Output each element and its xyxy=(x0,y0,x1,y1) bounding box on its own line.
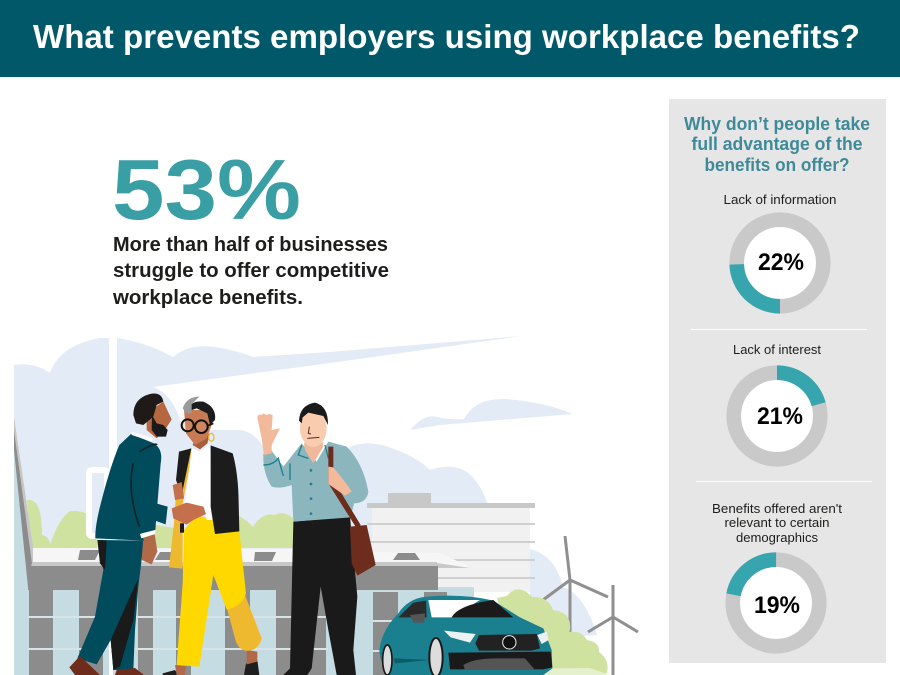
man in suit: shoes xyxy=(69,656,144,675)
car: mirror xyxy=(410,613,425,623)
panel heading: Why don’t people take xyxy=(684,114,870,134)
waving man: shirt xyxy=(263,442,368,522)
car: wheels xyxy=(429,638,443,675)
window frame white post xyxy=(109,338,117,675)
woman: orange lower leg xyxy=(227,595,262,651)
background: bushes behind window xyxy=(27,500,293,548)
statistic description: workplace benefits. xyxy=(112,287,303,309)
waving man: bag strap xyxy=(328,447,361,528)
donut chart: 21%: 21% xyxy=(757,403,803,430)
woman: hand on strap xyxy=(173,482,184,500)
man in suit: far sleeve xyxy=(153,503,168,524)
person: man in blue shirt waving xyxy=(257,403,376,675)
car: headlights xyxy=(444,631,549,644)
teal car xyxy=(379,596,552,675)
woman: clasped hands xyxy=(172,503,206,525)
rooftop walkway and facade xyxy=(14,417,474,675)
man in suit: hand xyxy=(142,534,157,564)
label: benefits not relevant to certain demographics xyxy=(712,501,842,545)
waving man: bag xyxy=(350,525,376,576)
woman: shoes xyxy=(163,660,259,675)
donut chart: 19%: 19% xyxy=(754,592,800,619)
label: benefits not relevant to certain demographics: demographics xyxy=(736,530,819,545)
label: benefits not relevant to certain demographics: Benefits offered aren't xyxy=(712,501,842,516)
panel heading: benefits on offer? xyxy=(704,155,850,175)
man in suit: trousers xyxy=(77,540,144,670)
donut chart: 22% xyxy=(737,220,823,306)
person: man in teal suit xyxy=(69,394,172,675)
headline statistic: 53%: 53% xyxy=(112,143,301,238)
car: windscreen xyxy=(428,600,480,617)
car: body xyxy=(379,596,552,675)
panel heading xyxy=(684,114,870,175)
title banner xyxy=(0,0,900,77)
wind turbines xyxy=(543,536,638,675)
ground xyxy=(350,668,610,675)
label: lack of information: Lack of information xyxy=(724,192,836,207)
woman: blazer xyxy=(176,445,239,534)
title banner: What prevents employers using workplace benefits? xyxy=(33,18,860,55)
waving man: trousers xyxy=(283,517,357,675)
person: woman in yellow trousers xyxy=(163,397,262,675)
illustration: city scene with three colleagues and a car xyxy=(14,336,638,675)
donut chart: 21% xyxy=(734,373,820,459)
panel heading: full advantage of the xyxy=(692,134,862,154)
man in suit: head xyxy=(133,394,172,438)
waving man: raised hand xyxy=(257,413,280,455)
statistic description: More than half of businesses xyxy=(113,234,388,256)
man in suit: jacket xyxy=(95,434,161,541)
woman: white shirt xyxy=(185,444,212,507)
background: office building xyxy=(367,493,535,592)
statistic description: struggle to offer competitive xyxy=(113,260,389,282)
waving man: head xyxy=(299,403,328,463)
bushes beside car xyxy=(497,589,608,673)
donut chart: 19% xyxy=(725,552,827,654)
car: lower bumper xyxy=(448,652,552,669)
donut chart: 22%: 22% xyxy=(758,249,804,276)
waving man: hand on strap xyxy=(328,467,352,496)
label: lack of interest: Lack of interest xyxy=(733,342,821,357)
woman: head xyxy=(182,397,215,449)
car: side windows xyxy=(398,601,427,617)
background: sky and clouds xyxy=(14,336,597,640)
panel: why people do not take advantage of benefits xyxy=(669,99,886,663)
label: benefits not relevant to certain demographics: relevant to certain xyxy=(724,515,830,530)
woman: yellow trousers xyxy=(177,515,246,667)
car: grille xyxy=(475,634,540,651)
statistic description xyxy=(112,234,389,309)
woman: cuff xyxy=(204,503,212,520)
woman: bag xyxy=(169,448,193,569)
